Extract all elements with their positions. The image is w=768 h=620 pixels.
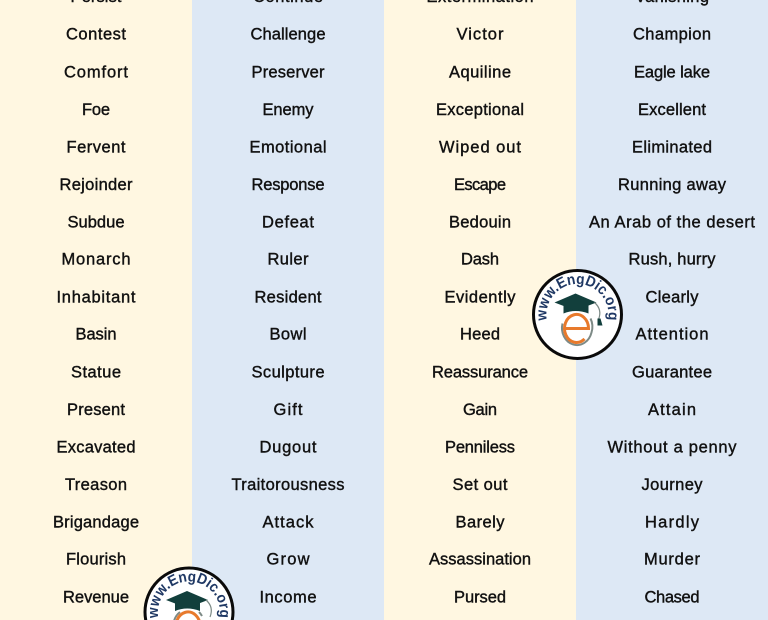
panel: column 4 words: Champion (633, 26, 711, 44)
panel: column 3 words: Gain (463, 401, 497, 419)
panel: column 1 words: Inhabitant (56, 289, 136, 307)
panel: column 2 words: Bowl (270, 326, 306, 344)
panel: column 4 words: Eliminated (632, 139, 712, 157)
panel: column 2 words: Resident (254, 289, 322, 307)
panel: column 3 words: Dash (461, 251, 499, 269)
panel: column 1 words: Flourish (66, 551, 126, 569)
panel: column 4 words: Hardly (645, 514, 700, 532)
panel: column 1 words: Revenue (63, 589, 129, 607)
panel: column 1 words: Statue (71, 364, 121, 382)
panel: column 2 words (192, 0, 384, 620)
panel: column 2 words: Emotional (250, 139, 326, 157)
panel: column 1 words: Monarch (62, 251, 130, 269)
panel: column 1 words: Foe (82, 101, 110, 119)
panel: column 4 words: Clearly (646, 289, 699, 307)
panel: column 2 words: Gift (274, 401, 303, 419)
icon: EngDic logo, centre right: www.EngDic.org (538, 275, 617, 321)
panel: column 2 words: Response (252, 176, 324, 194)
panel: column 1 words: Treason (65, 476, 127, 494)
panel: column 3 words (384, 0, 576, 620)
panel: column 3 words: Escape (454, 176, 506, 194)
panel: column 3 words: Reassurance (432, 364, 528, 382)
panel: column 3 words: Barely (456, 514, 505, 532)
icon: EngDic logo, centre right (532, 269, 623, 360)
panel: column 3 words: Assassination (429, 551, 531, 569)
panel: column 2 words: Defeat (262, 214, 314, 232)
panel: column 4 words: Excellent (638, 101, 706, 119)
panel: column 1 words: Rejoinder (60, 176, 133, 194)
panel: column 1 words (0, 0, 192, 620)
panel: column 3 words: Evidently (444, 289, 516, 307)
icon: EngDic logo, bottom: www.EngDic.org (150, 572, 228, 618)
panel: column 2 words: Grow (266, 551, 310, 569)
panel: column 3 words: Pursed (454, 589, 506, 607)
panel: column 2 words: Sculpture (252, 364, 324, 382)
panel: column 2 words: Dugout (260, 439, 317, 457)
panel: column 4 words: Guarantee (632, 364, 712, 382)
panel: column 1 words: Brigandage (53, 514, 139, 532)
panel: column 3 words: Bedouin (449, 214, 511, 232)
panel: column 4 words: Rush, hurry (628, 251, 716, 269)
panel: column 4 words: Without a penny (608, 439, 737, 457)
panel: column 1 words: Present (67, 401, 125, 419)
panel: column 3 words: Penniless (445, 439, 515, 457)
panel: column 4 words: An Arab of the desert (589, 214, 755, 232)
panel: column 3 words: Wiped out (439, 139, 521, 157)
panel: column 4 words: Murder (644, 551, 700, 569)
panel: column 4 words: Chased (644, 589, 700, 607)
panel: column 4 words (576, 0, 768, 620)
panel: column 4 words: Running away (618, 176, 727, 194)
panel: column 2 words: Traitorousness (232, 476, 344, 494)
panel: column 4 words: Attention (636, 326, 708, 344)
panel: column 2 words: Income (260, 589, 316, 607)
panel: column 2 words: Attack (262, 514, 314, 532)
panel: column 2 words: Preserver (252, 64, 325, 82)
panel: column 1 words: Basin (76, 326, 116, 344)
panel: column 2 words: Ruler (268, 251, 309, 269)
panel: column 1 words: Excavated (56, 439, 136, 457)
panel: column 3 words: Victor (456, 26, 504, 44)
panel: column 2 words: Challenge (250, 26, 326, 44)
panel: column 3 words: Set out (452, 476, 508, 494)
panel: column 1 words: Subdue (68, 214, 124, 232)
panel: column 3 words: Aquiline (449, 64, 511, 82)
panel: column 3 words: Heed (460, 326, 500, 344)
panel: column 4 words: Attain (648, 401, 696, 419)
panel: column 1 words: Fervent (66, 139, 126, 157)
panel: column 1 words: Comfort (64, 64, 128, 82)
panel: column 4 words: Journey (642, 476, 703, 494)
panel: column 1 words: Contest (66, 26, 126, 44)
panel: column 2 words: Enemy (262, 101, 314, 119)
panel: column 4 words: Eagle lake (634, 64, 710, 82)
panel: column 3 words: Exceptional (436, 101, 524, 119)
